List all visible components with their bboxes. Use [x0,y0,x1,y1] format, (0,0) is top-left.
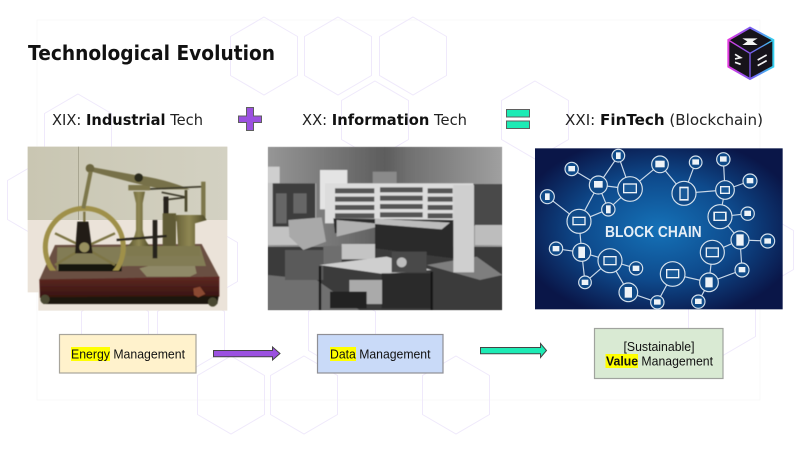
image: mainframe computer room [268,147,502,310]
box: Data Management [318,334,443,373]
heading: XXI FinTech (Blockchain): XXI: FinTech (Blockchain) [565,111,763,129]
arrow: green [480,344,546,358]
heading: XIX Industrial Tech: XIX: Industrial Tech [52,111,203,129]
arrow: purple [214,347,280,360]
icon: equals [506,110,530,128]
heading: XX Information Tech: XX: Information Tech [302,111,467,129]
image: blockchain network [535,148,783,309]
box: Energy Management: Energy Management [71,346,185,362]
box: Data Management: Data Management [330,346,431,362]
icon: plus [238,108,262,130]
box: Sustainable Value Management: Value Management [606,354,713,368]
image: blockchain network: BLOCK CHAIN [605,224,702,241]
box: Sustainable Value Management: [Sustainable] [624,339,694,354]
image: steam engine model [28,147,227,311]
title: Technological Evolution [28,41,275,65]
box: Sustainable Value Management [594,328,723,378]
box: Energy Management [60,334,196,373]
icon: cube logo [728,28,773,79]
